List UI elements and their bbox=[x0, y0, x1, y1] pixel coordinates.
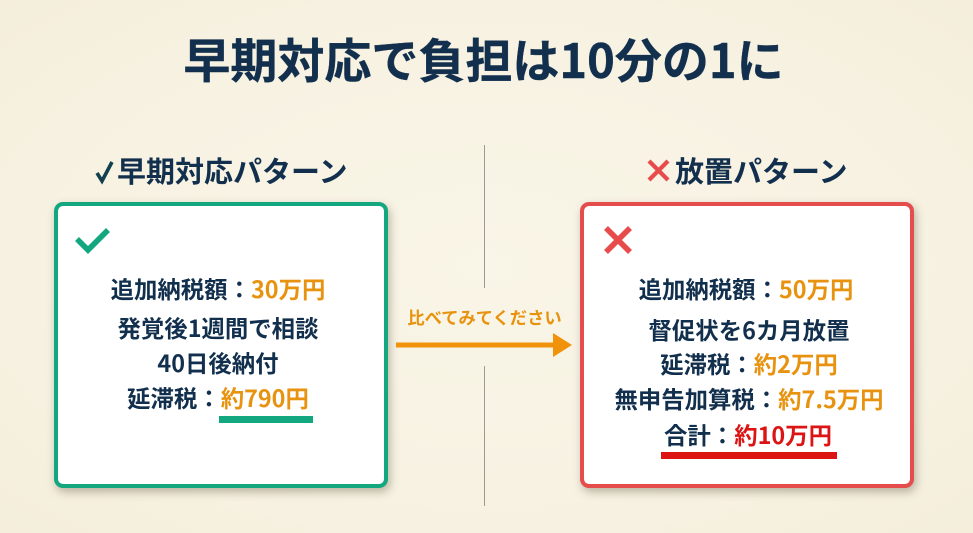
panel: early response bbox=[54, 202, 388, 488]
text: total: 合計：約10万円 bbox=[664, 417, 832, 451]
icon: heading cross mark bbox=[648, 160, 670, 182]
text: payment: 40日後納付 bbox=[157, 345, 279, 379]
heading: early response pattern: 早期対応パターン bbox=[117, 149, 348, 191]
text: late fee: 延滞税：約2万円 bbox=[660, 346, 838, 380]
title: 早期対応で負担は10分の1に bbox=[183, 23, 784, 92]
underline: total bbox=[661, 452, 837, 459]
arrow label: 比べてみてください bbox=[407, 304, 562, 329]
text: additional tax: 追加納税額：30万円 bbox=[111, 271, 325, 305]
icon: heading check mark bbox=[96, 161, 114, 185]
text: penalty tax: 無申告加算税：約7.5万円 bbox=[614, 381, 884, 415]
text: consultation: 発覚後1週間で相談 bbox=[118, 310, 318, 344]
heading: neglect pattern: 放置パターン bbox=[675, 149, 848, 191]
icon: green check mark bbox=[75, 228, 110, 254]
text: notice neglected: 督促状を6カ月放置 bbox=[649, 312, 849, 346]
text: additional tax: 追加納税額：50万円 bbox=[639, 271, 853, 305]
arrow: compare bbox=[396, 333, 572, 357]
icon: red cross mark bbox=[604, 226, 632, 254]
underline: late fee bbox=[219, 416, 313, 423]
panel: neglect bbox=[580, 202, 914, 488]
text: late fee: 延滞税：約790円 bbox=[127, 380, 309, 414]
